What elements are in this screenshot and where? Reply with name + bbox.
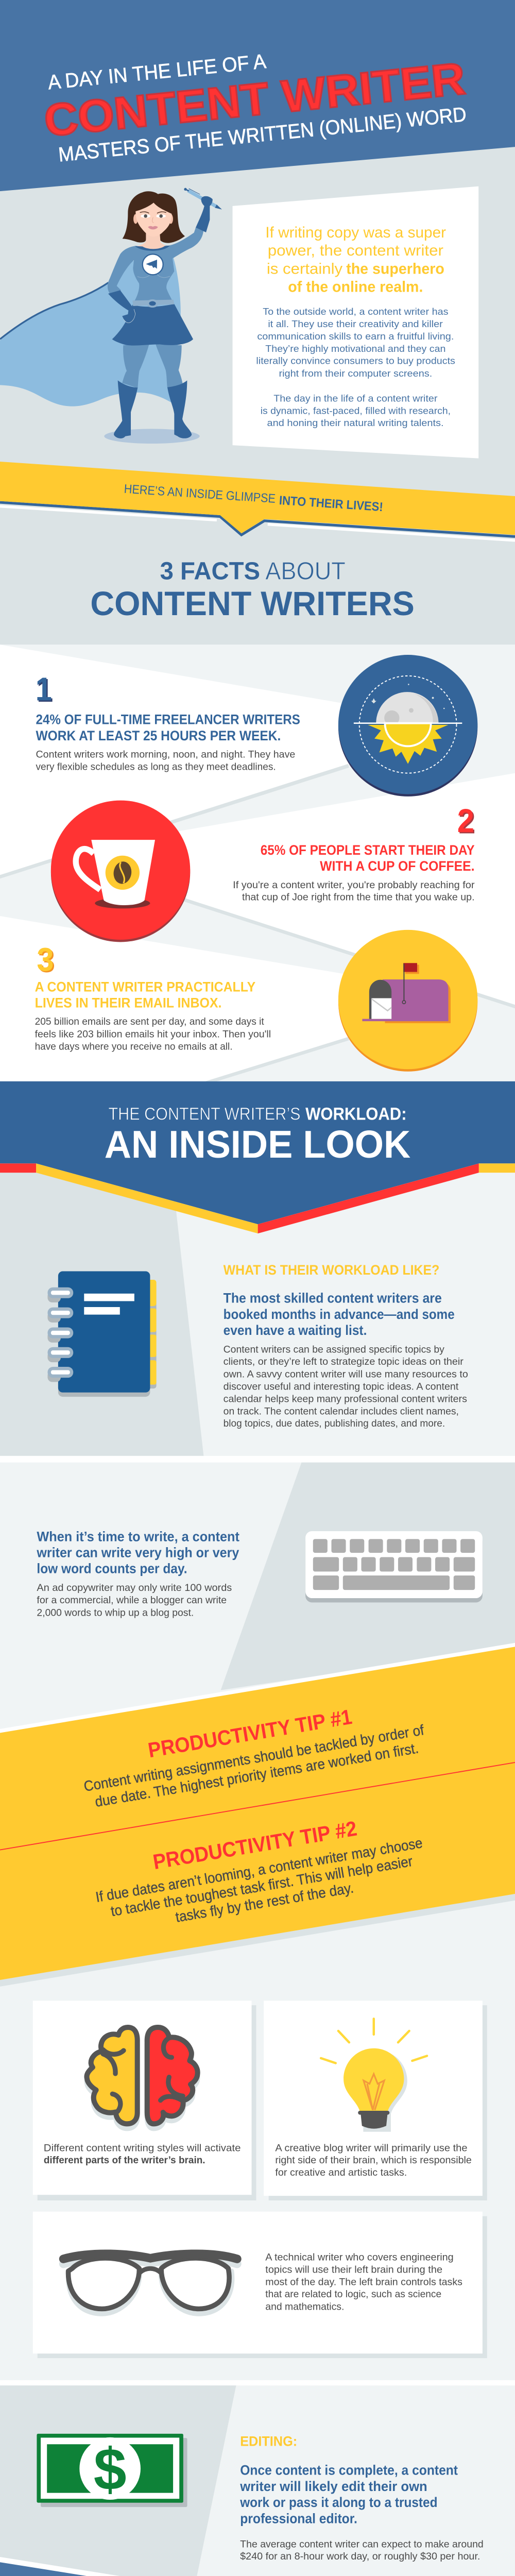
heading: 3 facts about content writers: ABOUT bbox=[265, 557, 346, 585]
panel: word counts bbox=[36, 1529, 483, 1618]
editing key statement bbox=[239, 2463, 458, 2526]
panel: workload heading banner: AN INSIDE LOOK bbox=[105, 1123, 410, 1166]
fact 1 body bbox=[36, 750, 295, 772]
word count heading: writer can write very high or very bbox=[36, 1545, 239, 1560]
word count body: 2,000 words to whip up a blog post. bbox=[37, 1607, 194, 1618]
workload body: clients, or they’re left to strategize topic ideas on their bbox=[224, 1357, 464, 1367]
fact 2 body: that cup of Joe right from the time that you wake up. bbox=[242, 892, 475, 903]
editing body bbox=[240, 2539, 484, 2562]
fact 3 body: feels like 203 billion emails hit your inbox. Then you'll bbox=[35, 1029, 271, 1040]
productivity tip 2: to tackle the toughest task first. This will help easier bbox=[110, 1853, 414, 1919]
word count body: for a commercial, while a blogger can write bbox=[37, 1595, 227, 1606]
productivity tip 2: tasks fly by the rest of the day. bbox=[174, 1879, 355, 1925]
intro body text: right from their computer screens. bbox=[279, 368, 432, 379]
number 2: 2 bbox=[458, 803, 475, 840]
workload body: calendar helps keep many professional content writers bbox=[224, 1394, 467, 1404]
intro headline: is certainly bbox=[267, 260, 343, 277]
intro headline: If writing copy was a super bbox=[265, 224, 446, 241]
editing key statement: work or pass it along to a trusted bbox=[239, 2495, 437, 2510]
intro headline: of the online realm. bbox=[288, 278, 423, 295]
brain card text: different parts of the writer’s brain. bbox=[44, 2155, 205, 2166]
intro headline: power, the content writer bbox=[268, 242, 443, 259]
editing key statement: Once content is complete, a content bbox=[240, 2463, 458, 2478]
fact 3 body: 205 billion emails are sent per day, and some days it bbox=[35, 1016, 264, 1027]
word count heading: When it’s time to write, a content bbox=[37, 1529, 239, 1545]
panel: workload section backgrounds bbox=[0, 1163, 515, 2380]
fact 3 heading: LIVES IN THEIR EMAIL INBOX. bbox=[35, 995, 221, 1010]
banner: inside glimpse ribbon: HERE’S AN INSIDE GLIMPSE bbox=[124, 482, 276, 506]
fact 2 body: If you're a content writer, you're probably reaching for bbox=[233, 880, 475, 891]
banner: inside glimpse ribbon: INTO THEIR LIVES! bbox=[279, 494, 384, 514]
editing body: $240 for an 8-hour work day, or roughly $30 per hour. bbox=[240, 2551, 480, 2562]
number 3: 3 bbox=[37, 941, 54, 978]
fact 2 heading: WITH A CUP OF COFFEE. bbox=[320, 858, 475, 874]
intro body text: communication skills to earn a fruitful living. bbox=[257, 331, 454, 342]
editing body: The average content writer can expect to make around bbox=[240, 2539, 484, 2550]
brain card text bbox=[44, 2143, 241, 2166]
panel: light bulb card bbox=[264, 2001, 487, 2200]
glasses card text: topics will use their left brain during the bbox=[265, 2264, 442, 2275]
icon: moon and sun bbox=[338, 655, 477, 796]
intro body text: is dynamic, fast-paced, filled with research, bbox=[261, 405, 451, 416]
panel: editing bbox=[0, 2380, 515, 2576]
panel: workload bbox=[47, 1262, 468, 1429]
panel: workload heading banner: THE CONTENT WRITER’S bbox=[108, 1104, 301, 1124]
panel: workload heading banner: WORKLOAD: bbox=[305, 1104, 407, 1124]
panel: closing statement bbox=[0, 2557, 515, 2576]
intro body text: it all. They use their creativity and killer bbox=[268, 318, 443, 329]
icon: brain bbox=[87, 2027, 198, 2128]
heading: 3 facts about content writers: 3 FACTS bbox=[160, 557, 260, 585]
number 2: 2 bbox=[457, 802, 474, 839]
workload body: own. A savvy content writer will use many resources to bbox=[224, 1369, 468, 1380]
icon: dollar bill: $ bbox=[94, 2436, 127, 2502]
panel: glasses card bbox=[33, 2212, 487, 2358]
number 1: 1 bbox=[37, 672, 53, 709]
intro body text: They’re highly motivational and they can bbox=[265, 343, 445, 354]
icon: glasses bbox=[63, 2254, 237, 2314]
icon: keyboard bbox=[305, 1531, 483, 1602]
glasses card text: that are related to logic, such as science bbox=[265, 2289, 441, 2300]
intro body text: literally convince consumers to buy products bbox=[256, 355, 455, 366]
workload key statement bbox=[224, 1291, 455, 1338]
icon: notebook bbox=[47, 1271, 157, 1397]
word count body bbox=[37, 1583, 232, 1618]
heading: 3 facts about content writers: CONTENT WRITERS bbox=[90, 585, 415, 623]
bulb card text: A creative blog writer will primarily use the bbox=[275, 2143, 468, 2154]
heading: 3 facts about content writers bbox=[90, 557, 415, 623]
fact 1 bbox=[36, 655, 477, 796]
bulb card text bbox=[275, 2143, 472, 2178]
title: MASTERS OF THE WRITTEN (ONLINE) WORD bbox=[57, 103, 468, 166]
productivity tip 1: PRODUCTIVITY TIP #1 bbox=[146, 1705, 354, 1762]
banner: inside glimpse ribbon bbox=[0, 462, 515, 540]
bulb card text: right side of their brain, which is responsible bbox=[275, 2155, 472, 2166]
panel: brain card bbox=[33, 2001, 256, 2200]
icon: mailbox bbox=[338, 930, 477, 1072]
number 1: 1 bbox=[36, 671, 52, 708]
workload key statement: The most skilled content writers are bbox=[224, 1291, 442, 1306]
productivity tip 1: Content writing assignments should be tackled by order of bbox=[82, 1722, 425, 1794]
icon: dollar bill bbox=[37, 2434, 187, 2507]
workload key statement: booked months in advance—and some bbox=[224, 1307, 455, 1322]
productivity tip 2: If due dates aren’t looming, a content writer may choose bbox=[94, 1835, 424, 1905]
glasses card text bbox=[265, 2252, 462, 2312]
intro body text bbox=[256, 306, 455, 428]
fact 2 heading bbox=[261, 842, 475, 874]
workload body: on track. The content calendar includes client names, bbox=[224, 1406, 459, 1417]
glasses card text: most of the day. The left brain controls tasks bbox=[265, 2277, 462, 2288]
title: A DAY IN THE LIFE OF A bbox=[47, 50, 267, 94]
intro body text: To the outside world, a content writer has bbox=[263, 306, 449, 317]
intro body text: The day in the life of a content writer bbox=[273, 393, 437, 403]
fact 1 heading bbox=[36, 712, 300, 743]
panel: workload heading banner bbox=[0, 1081, 515, 1233]
word count body: An ad copywriter may only write 100 words bbox=[37, 1583, 232, 1594]
intro headline: the superhero bbox=[346, 260, 444, 277]
panel: facts background bbox=[0, 645, 515, 1081]
workload body: discover useful and interesting topic ideas. A content bbox=[224, 1382, 459, 1393]
panel: intro card bbox=[233, 187, 478, 459]
editing key statement: writer will likely edit their own bbox=[239, 2479, 427, 2494]
productivity tip 1 bbox=[82, 1705, 425, 1810]
icon: light bulb bbox=[321, 2019, 427, 2132]
glasses card text: A technical writer who covers engineering bbox=[265, 2252, 454, 2263]
fact 1 heading: WORK AT LEAST 25 HOURS PER WEEK. bbox=[36, 728, 281, 743]
fact 3 body bbox=[35, 1016, 271, 1053]
intro body text: and honing their natural writing talents. bbox=[267, 417, 444, 428]
intro headline bbox=[265, 224, 446, 295]
workload question heading: WHAT IS THEIR WORKLOAD LIKE? bbox=[224, 1262, 439, 1278]
hero background bbox=[0, 0, 515, 645]
productivity tip 2: PRODUCTIVITY TIP #2 bbox=[151, 1817, 358, 1874]
productivity tip 1: due date. The highest priority items are worked on first. bbox=[94, 1740, 420, 1810]
editing heading: EDITING: bbox=[240, 2433, 297, 2449]
fact 2 body bbox=[233, 880, 475, 903]
workload key statement: even have a waiting list. bbox=[224, 1323, 367, 1338]
fact 3 body: have days where you receive no emails at all. bbox=[35, 1042, 233, 1053]
editing key statement: professional editor. bbox=[240, 2511, 357, 2526]
workload body: Content writers can be assigned specific topics by bbox=[224, 1345, 444, 1355]
panel: productivity tips band bbox=[0, 1643, 515, 1987]
icon: coffee cup bbox=[51, 801, 190, 942]
fact 1 heading: 24% OF FULL-TIME FREELANCER WRITERS bbox=[36, 712, 300, 727]
fact 2 bbox=[51, 801, 475, 942]
bulb card text: for creative and artistic tasks. bbox=[275, 2167, 407, 2178]
workload body bbox=[224, 1345, 468, 1429]
fact 1 body: very flexible schedules as long as they meet deadlines. bbox=[36, 761, 276, 772]
brain card text: Different content writing styles will activate bbox=[44, 2143, 241, 2154]
fact 1 body: Content writers work morning, noon, and night. They have bbox=[36, 750, 295, 760]
illustration: superhero writer bbox=[0, 188, 222, 444]
fact 3 bbox=[35, 930, 477, 1072]
fact 3 heading bbox=[35, 979, 255, 1010]
productivity tip 2 bbox=[94, 1817, 424, 1925]
number 3: 3 bbox=[38, 942, 55, 979]
glasses card text: and mathematics. bbox=[265, 2301, 344, 2312]
title: CONTENT WRITER bbox=[42, 53, 468, 146]
word count heading: low word counts per day. bbox=[37, 1561, 187, 1577]
workload body: blog topics, due dates, publishing dates, and more. bbox=[224, 1418, 445, 1429]
word count heading bbox=[36, 1529, 239, 1577]
fact 2 heading: 65% OF PEOPLE START THEIR DAY bbox=[261, 842, 475, 858]
fact 3 heading: A CONTENT WRITER PRACTICALLY bbox=[35, 979, 255, 995]
